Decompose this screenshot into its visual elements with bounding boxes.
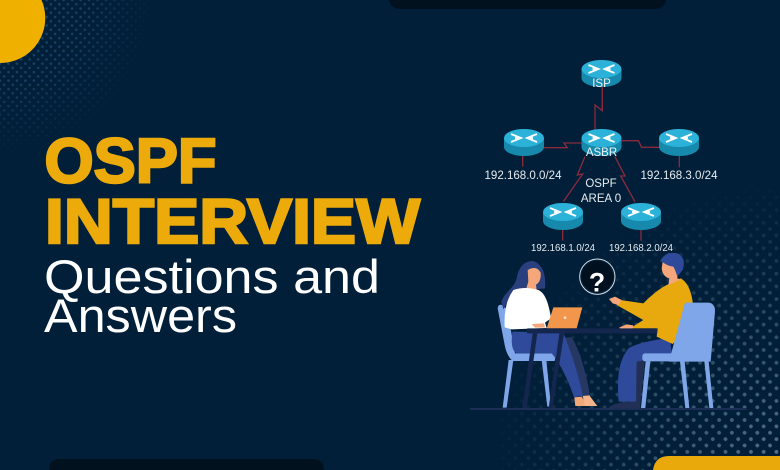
dark tab: bottom left [49, 459, 324, 470]
halftone dots: bottom right [516, 208, 778, 470]
heading: OSPF: OSPF [44, 126, 216, 196]
router: 192.168.1.0/24 [531, 203, 595, 254]
title [44, 126, 421, 342]
yellow circle: top left corner [0, 0, 45, 63]
router: ISP [582, 60, 622, 90]
shoes [574, 397, 587, 406]
router: 192.168.2.0/24 [609, 203, 673, 254]
heading: INTERVIEW: INTERVIEW [45, 187, 421, 257]
hand [532, 323, 545, 328]
question mark badge: ? [589, 267, 605, 297]
man [608, 253, 693, 408]
neck and face [526, 268, 541, 291]
label: OSPF AREA 0: OSPF [585, 178, 617, 190]
sweater [505, 288, 551, 329]
network diagram [484, 60, 718, 254]
woman [501, 261, 597, 406]
dark tab: top [389, 0, 666, 9]
hands [609, 297, 622, 305]
laptop [547, 307, 582, 328]
floor line [470, 408, 747, 410]
subheading: Questions and: Questions and [44, 250, 380, 303]
man's chair [641, 303, 715, 408]
router: 192.168.0.0/24: 192.168.0.0/24 [484, 168, 562, 182]
router: 192.168.2.0/24: 192.168.2.0/24 [609, 242, 673, 254]
router: ISP: ISP [592, 78, 611, 90]
woman's chair [498, 305, 555, 408]
subheading: Answers: Answers [44, 289, 237, 342]
interview illustration [470, 253, 747, 410]
far leg [558, 337, 590, 397]
network links [523, 87, 679, 241]
router: ASBR: ASBR [586, 147, 617, 159]
yellow tab: bottom right [653, 456, 780, 470]
near leg [512, 332, 583, 397]
sweater [617, 278, 693, 344]
table [522, 328, 657, 408]
router: ASBR [582, 129, 622, 159]
question mark badge [580, 259, 615, 297]
halftone dots: top left [0, 0, 141, 141]
router: 192.168.3.0/24 [640, 129, 718, 182]
router: 192.168.1.0/24: 192.168.1.0/24 [531, 242, 595, 254]
label: OSPF AREA 0 [581, 178, 621, 205]
hair [661, 253, 684, 277]
label: OSPF AREA 0: AREA 0 [581, 193, 621, 205]
router: 192.168.0.0/24 [484, 129, 562, 182]
trousers [618, 337, 672, 402]
router: 192.168.3.0/24: 192.168.3.0/24 [640, 168, 718, 182]
hair [501, 261, 545, 309]
face and neck [662, 262, 681, 285]
shadow leg and shoe [608, 360, 645, 408]
